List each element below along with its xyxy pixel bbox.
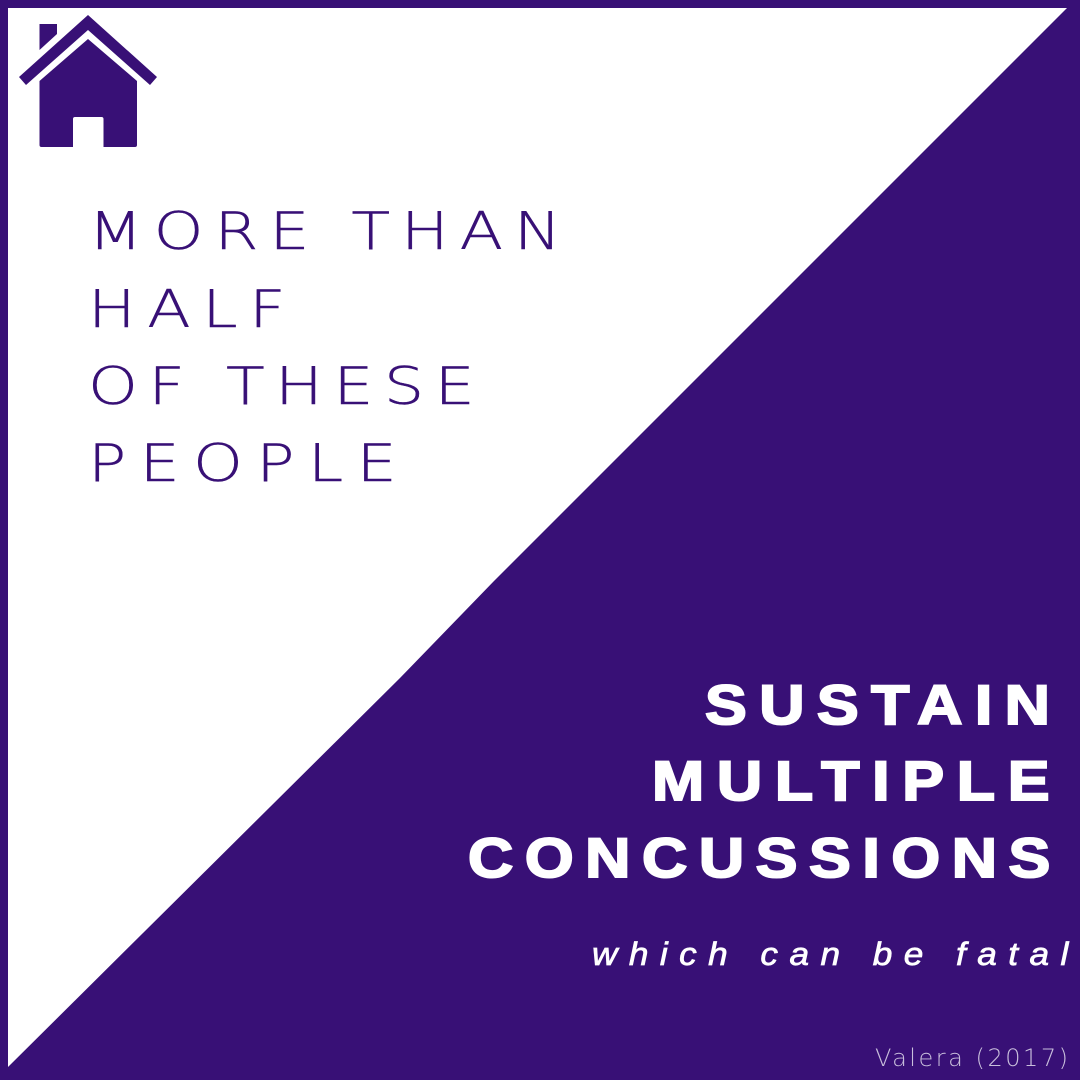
heading: sustain multiple concussions: CONCUSSIONS <box>468 826 1050 889</box>
heading: sustain multiple concussions: SUSTAIN <box>705 673 1050 736</box>
heading: sustain multiple concussions <box>468 673 1050 889</box>
text block: which can be fatal: which can be fatal <box>592 937 1070 973</box>
heading: sustain multiple concussions: MULTIPLE <box>652 749 1050 812</box>
heading: more than half of these people: MORE THAN <box>88 201 561 262</box>
citation: Valera (2017): Valera (2017) <box>875 1044 1068 1072</box>
heading: more than half of these people: OF THESE <box>88 356 475 417</box>
heading: more than half of these people: PEOPLE <box>88 433 397 494</box>
heading: more than half of these people: HALF <box>88 279 286 340</box>
icon: house <box>19 15 157 147</box>
heading: more than half of these people <box>88 201 561 494</box>
